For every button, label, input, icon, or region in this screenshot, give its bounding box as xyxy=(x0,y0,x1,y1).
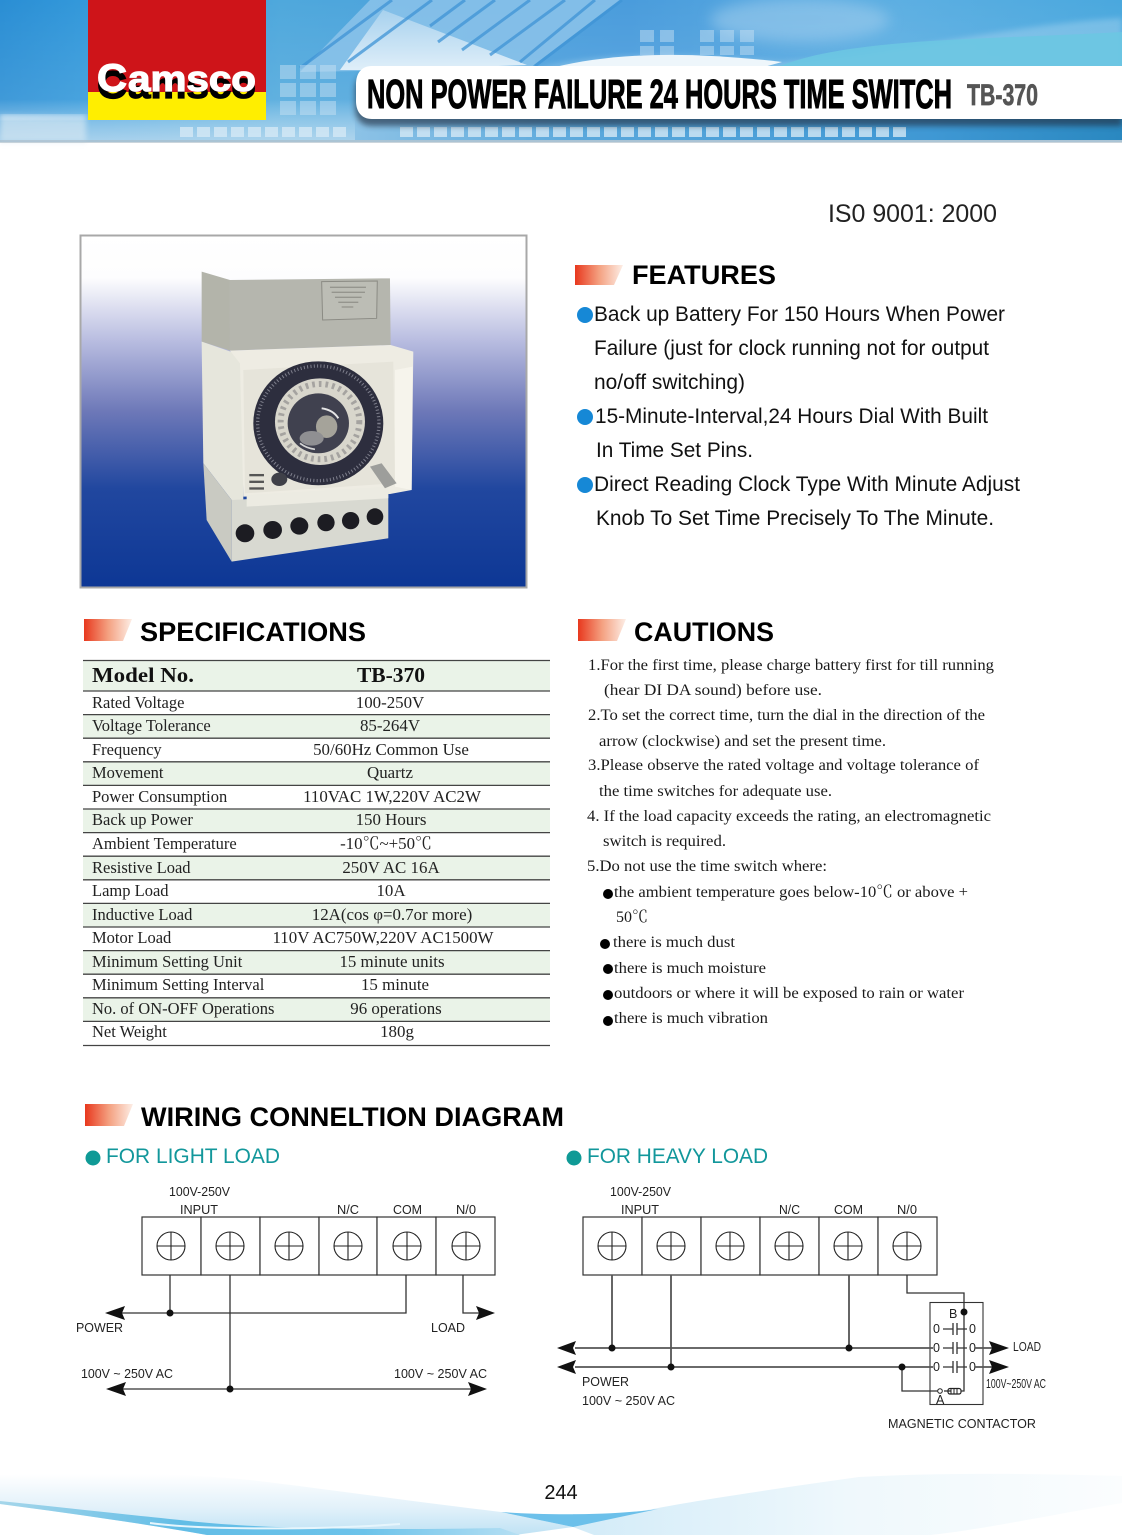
wiring labels: N/C xyxy=(337,1203,359,1217)
magnetic contactor: 0 xyxy=(969,1341,976,1355)
features list: Direct Reading Clock Type With Minute Adjust xyxy=(594,473,1020,496)
table labels: Net Weight xyxy=(92,1022,167,1041)
features list: In Time Set Pins. xyxy=(596,439,753,462)
wiring labels: 100V ~ 250V AC xyxy=(394,1367,487,1381)
cautions list: switch is required. xyxy=(603,833,726,850)
table header row: TB-370 xyxy=(357,663,425,687)
magnetic contactor: 0 xyxy=(933,1360,940,1374)
table labels: Motor Load xyxy=(92,928,172,947)
logo: Camsco: amsco xyxy=(128,65,256,106)
features list: Failure (just for clock running not for output xyxy=(594,337,989,360)
wiring labels: 100V~250V AC xyxy=(986,1377,1046,1391)
wiring labels: LOAD xyxy=(1013,1340,1041,1354)
wiring labels: POWER xyxy=(582,1375,629,1389)
cautions list: (hear DI DA sound) before use. xyxy=(604,682,822,699)
diagram: heavy load wiring xyxy=(557,1185,1046,1431)
features list: no/off switching) xyxy=(594,371,745,394)
table labels: Ambient Temperature xyxy=(92,834,237,853)
table values: 96 operations xyxy=(350,999,442,1018)
title bar xyxy=(355,66,1122,126)
cautions list: 4. If the load capacity exceeds the rating, an electromagnetic xyxy=(587,808,991,825)
wiring labels: COM xyxy=(834,1203,863,1217)
wiring labels: INPUT xyxy=(621,1203,659,1217)
table values: Quartz xyxy=(367,763,413,782)
table values: 15 minute units xyxy=(339,952,445,971)
table labels: No. of ON-OFF Operations xyxy=(92,999,274,1018)
table values: 100-250V xyxy=(356,693,425,712)
product photo panel xyxy=(80,236,526,588)
wires xyxy=(557,1275,1009,1391)
table labels: Inductive Load xyxy=(92,905,193,924)
logo: Camsco xyxy=(88,0,266,120)
table header row: Model No. xyxy=(92,663,194,687)
table labels: Rated Voltage xyxy=(92,693,184,712)
model number: TB-370 xyxy=(967,79,1038,112)
wiring labels: COM xyxy=(393,1203,422,1217)
heading: features: FEATURES xyxy=(632,260,776,290)
table values: 85-264V xyxy=(360,716,421,735)
features list xyxy=(577,303,1020,530)
magnetic contactor: A xyxy=(936,1393,945,1407)
header banner xyxy=(0,0,1122,143)
table labels: Minimum Setting Unit xyxy=(92,952,243,971)
table labels: Frequency xyxy=(92,740,162,759)
cautions list: 3.Please observe the rated voltage and voltage tolerance of xyxy=(588,757,980,774)
footer wave xyxy=(0,1473,1122,1535)
wiring labels: N/C xyxy=(779,1203,800,1217)
magnetic contactor xyxy=(930,1302,983,1407)
terminal block xyxy=(142,1217,495,1275)
magnetic contactor: 0 xyxy=(969,1322,976,1336)
cautions list: 50℃ xyxy=(616,909,648,926)
wiring labels: MAGNETIC CONTACTOR xyxy=(888,1417,1036,1431)
table values: 15 minute xyxy=(361,975,429,994)
table labels: Minimum Setting Interval xyxy=(92,975,265,994)
table labels: Movement xyxy=(92,763,164,782)
logo: Camsco: C xyxy=(97,64,127,107)
magnetic contactor: 0 xyxy=(933,1341,940,1355)
cautions list: arrow (clockwise) and set the present time. xyxy=(599,733,886,750)
cautions list: there is much vibration xyxy=(614,1010,768,1027)
table labels: Voltage Tolerance xyxy=(92,716,211,735)
table values: 180g xyxy=(380,1022,414,1041)
magnetic contactor: 0 xyxy=(969,1360,976,1374)
table values: 250V AC 16A xyxy=(342,858,440,877)
table labels: Lamp Load xyxy=(92,881,169,900)
features list: Back up Battery For 150 Hours When Power xyxy=(594,303,1005,326)
wires xyxy=(105,1275,495,1396)
wiring labels: 100V-250V xyxy=(610,1185,672,1199)
cautions list: there is much dust xyxy=(613,934,736,951)
heading: specifications: SPECIFICATIONS xyxy=(140,617,366,647)
logo: Camsco: amsco xyxy=(128,58,256,99)
table labels xyxy=(92,693,274,1041)
cautions list xyxy=(587,657,994,1027)
cautions list: 2.To set the correct time, turn the dial in the direction of the xyxy=(588,707,985,724)
table values: 12A(cos φ=0.7or more) xyxy=(312,905,472,924)
table labels: Back up Power xyxy=(92,810,193,829)
wiring labels xyxy=(76,1185,487,1381)
cautions list: outdoors or where it will be exposed to rain or water xyxy=(614,985,965,1002)
table values: 10A xyxy=(376,881,406,900)
wiring labels: LOAD xyxy=(431,1321,465,1335)
table values xyxy=(272,693,494,1041)
cautions list: the ambient temperature goes below-10℃ or above + xyxy=(614,884,968,901)
diagram: light load wiring xyxy=(76,1185,495,1396)
heading: cautions: CAUTIONS xyxy=(634,617,774,647)
magnetic contactor: B xyxy=(949,1307,957,1321)
table labels: Power Consumption xyxy=(92,787,227,806)
table values: 110VAC 1W,220V AC2W xyxy=(303,787,481,806)
table values: 50/60Hz Common Use xyxy=(313,740,469,759)
subheading: for light load: FOR LIGHT LOAD xyxy=(106,1145,280,1168)
heading: wiring diagram: WIRING CONNELTION DIAGRAM xyxy=(141,1102,564,1132)
page number: 244 xyxy=(544,1482,578,1504)
cautions list: there is much moisture xyxy=(614,960,766,977)
table header row xyxy=(92,663,425,687)
table values: 150 Hours xyxy=(356,810,426,829)
wiring labels: 100V ~ 250V AC xyxy=(81,1367,173,1381)
wiring labels: 100V ~ 250V AC xyxy=(582,1394,675,1408)
wiring labels xyxy=(582,1185,1046,1431)
wiring labels: N/0 xyxy=(897,1203,917,1217)
cautions list: 5.Do not use the time switch where: xyxy=(587,858,827,875)
table values: 110V AC750W,220V AC1500W xyxy=(272,928,494,947)
table values: -10℃~+50℃ xyxy=(340,834,432,853)
cautions list: 1.For the first time, please charge battery first for till running xyxy=(588,657,994,674)
wiring labels: 100V-250V xyxy=(169,1185,231,1199)
features list: Knob To Set Time Precisely To The Minute. xyxy=(596,507,994,530)
wiring labels: INPUT xyxy=(180,1203,218,1217)
wiring labels: N/0 xyxy=(456,1203,476,1217)
magnetic contactor: 0 xyxy=(933,1322,940,1336)
features list: 15-Minute-Interval,24 Hours Dial With Built xyxy=(595,405,988,428)
subheading: for heavy load: FOR HEAVY LOAD xyxy=(587,1145,768,1168)
logo: Camsco: C xyxy=(97,57,127,100)
time switch device xyxy=(202,272,413,562)
terminal block xyxy=(583,1217,937,1275)
wiring labels: POWER xyxy=(76,1321,123,1335)
cautions list: the time switches for adequate use. xyxy=(599,783,832,800)
table labels: Resistive Load xyxy=(92,858,191,877)
ISO certification: IS0 9001: 2000 xyxy=(828,200,997,228)
specifications table xyxy=(83,660,550,1046)
